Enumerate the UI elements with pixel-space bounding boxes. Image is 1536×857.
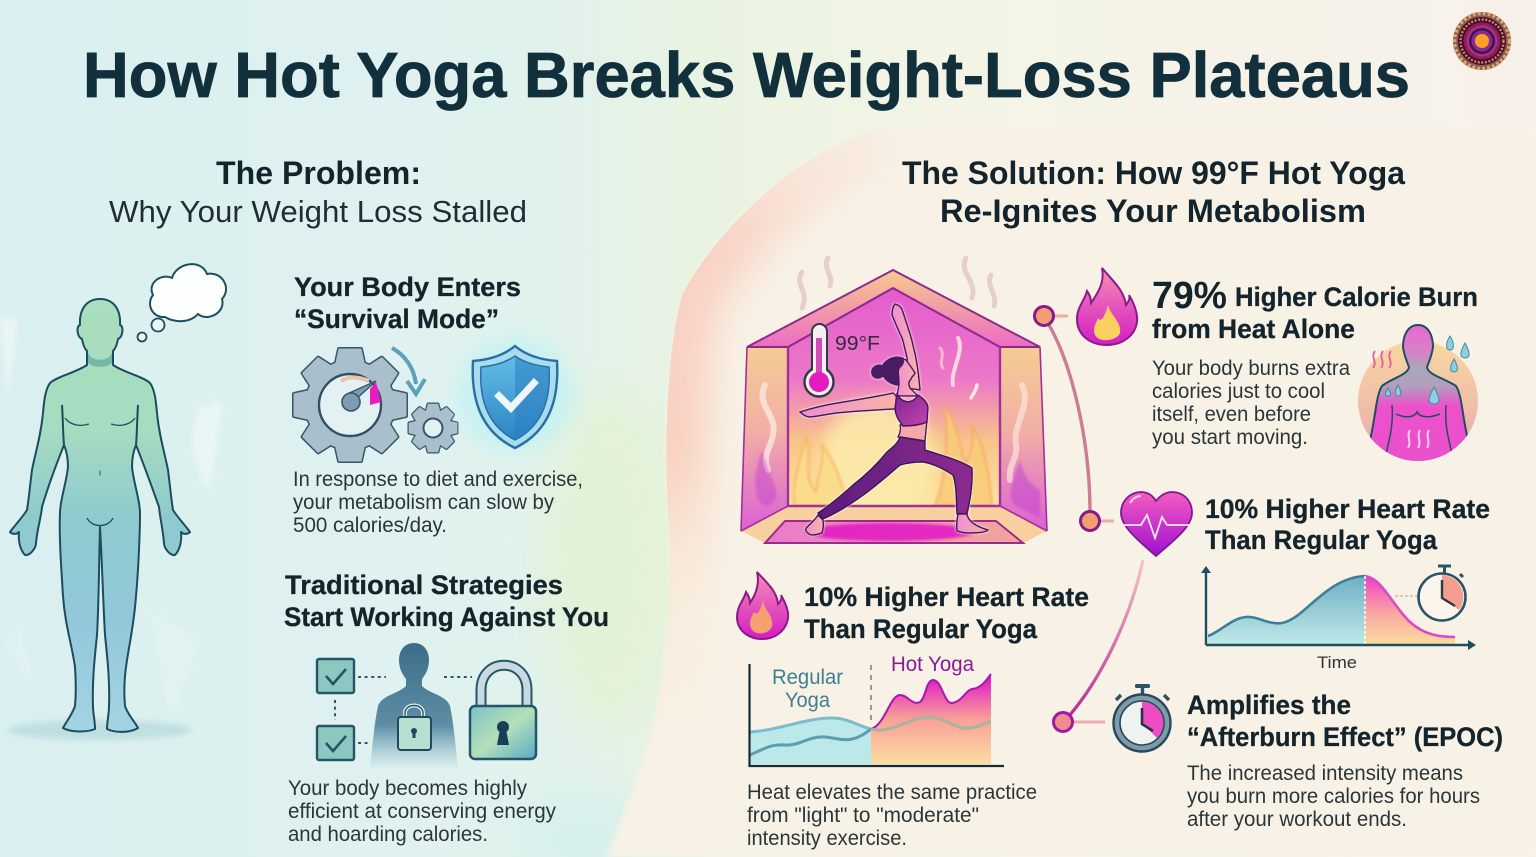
icon: stopwatch large — [1114, 684, 1170, 752]
text: calorie burn: calories just to cool — [1152, 380, 1325, 403]
heading: the solution — [902, 155, 1405, 229]
text: calorie burn — [1152, 357, 1350, 449]
text: calorie burn: itself, even before — [1152, 403, 1311, 426]
heading: traditional strategies — [284, 570, 609, 632]
text: calorie burn: you start moving. — [1152, 426, 1308, 449]
walls — [741, 347, 788, 531]
steam — [800, 258, 995, 308]
heading: the problem: The Problem: — [216, 155, 421, 191]
heading: heart rate lower: 10% Higher Heart Rate — [804, 582, 1089, 612]
heading: survival mode: Your Body Enters — [294, 272, 521, 302]
chart: regular vs hot yoga: Hot Yoga — [891, 653, 974, 676]
text: traditional strategies: efficient at conserving energy — [288, 800, 556, 823]
wall flames — [794, 338, 992, 524]
icon: stopwatch — [1418, 566, 1466, 620]
text: survival mode: In response to diet and exercise, — [293, 468, 583, 491]
yoga figure — [800, 304, 988, 535]
chart: regular vs hot yoga — [750, 653, 1004, 766]
icon: slowing metabolism gear — [294, 348, 457, 461]
panel: the solution — [737, 155, 1503, 850]
heading: heart rate lower: Than Regular Yoga — [804, 614, 1038, 644]
heading: the solution: The Solution: How 99°F Hot Yoga — [902, 155, 1405, 191]
heading: the problem — [109, 155, 527, 229]
icon: mandala logo — [1453, 12, 1511, 70]
raised arm — [892, 304, 920, 390]
heading: 79 percent calorie burn: from Heat Alone — [1152, 314, 1355, 344]
heading: heart rate right — [1205, 494, 1490, 555]
text: heat intensity: Heat elevates the same practice — [747, 781, 1037, 804]
heading: heart rate right: 10% Higher Heart Rate — [1205, 494, 1490, 524]
text: heat intensity: intensity exercise. — [747, 827, 907, 850]
heading: the problem: Why Your Weight Loss Stalled — [109, 194, 527, 229]
heading: survival mode — [294, 272, 521, 334]
front foot — [957, 514, 988, 533]
thermometer label: 99°F — [835, 333, 880, 355]
icon: shield — [457, 337, 573, 453]
text: afterburn: you burn more calories for hours — [1187, 785, 1480, 808]
title: How Hot Yoga Breaks Weight-Loss Plateaus — [83, 39, 1410, 111]
icon: heart with pulse — [1121, 492, 1192, 556]
connector arc: top — [1034, 306, 1114, 530]
face and neck — [897, 359, 918, 396]
hair — [871, 356, 904, 386]
text: afterburn: The increased intensity means — [1187, 762, 1463, 785]
heading: the solution: Re-Ignites Your Metabolism — [940, 193, 1366, 229]
front arm — [800, 393, 898, 417]
connector arc: lower — [1054, 560, 1143, 732]
thermometer — [804, 324, 834, 396]
chart: regular vs hot yoga: Yoga — [785, 689, 830, 712]
heading: 79 percent calorie burn: 79% — [1152, 275, 1227, 317]
chart axis label: time: Time — [1317, 653, 1357, 672]
yoga mat — [765, 521, 1023, 543]
heading: 79 percent calorie burn: Higher Calorie Burn — [1235, 282, 1478, 312]
text: afterburn: after your workout ends. — [1187, 808, 1407, 831]
text: traditional strategies — [288, 777, 556, 846]
heading: 79 percent calorie burn — [1152, 275, 1478, 344]
heading: afterburn: “Afterburn Effect” (EPOC) — [1187, 722, 1503, 752]
text: afterburn — [1187, 762, 1480, 831]
leggings — [818, 437, 972, 519]
heading: traditional strategies: Traditional Strategies — [285, 570, 563, 600]
icon: flame — [1077, 268, 1137, 345]
illustration: hot yoga room — [741, 258, 1047, 543]
text: traditional strategies: and hoarding calories. — [288, 823, 488, 846]
heading: afterburn: Amplifies the — [1187, 690, 1351, 720]
icon: sweating torso — [1358, 325, 1478, 470]
text: calorie burn: Your body burns extra — [1152, 357, 1350, 380]
icon: checklist and locked body — [317, 643, 536, 770]
top — [895, 394, 928, 426]
heading: survival mode: “Survival Mode” — [294, 304, 499, 334]
heading: heart rate lower — [804, 582, 1089, 644]
text: survival mode: 500 calories/day. — [293, 514, 447, 537]
heading: heart rate right: Than Regular Yoga — [1205, 525, 1438, 555]
midriff — [898, 421, 927, 441]
panel: the problem — [8, 155, 609, 846]
icon: standing body figure — [8, 299, 192, 740]
text: heat intensity: from "light" to "moderate" — [747, 804, 979, 827]
heading: traditional strategies: Start Working Against You — [284, 602, 609, 632]
text: traditional strategies: Your body becomes highly — [288, 777, 527, 800]
chart: afterburn curve — [1201, 566, 1476, 650]
icon: thought cloud — [138, 264, 226, 342]
back foot — [806, 515, 823, 535]
text: survival mode: your metabolism can slow by — [293, 491, 554, 514]
chart: regular vs hot yoga: Regular — [772, 666, 843, 689]
heading: afterburn — [1187, 690, 1503, 752]
text: survival mode — [293, 468, 583, 537]
text: heat intensity — [747, 781, 1037, 850]
icon: flame lower — [737, 572, 788, 639]
